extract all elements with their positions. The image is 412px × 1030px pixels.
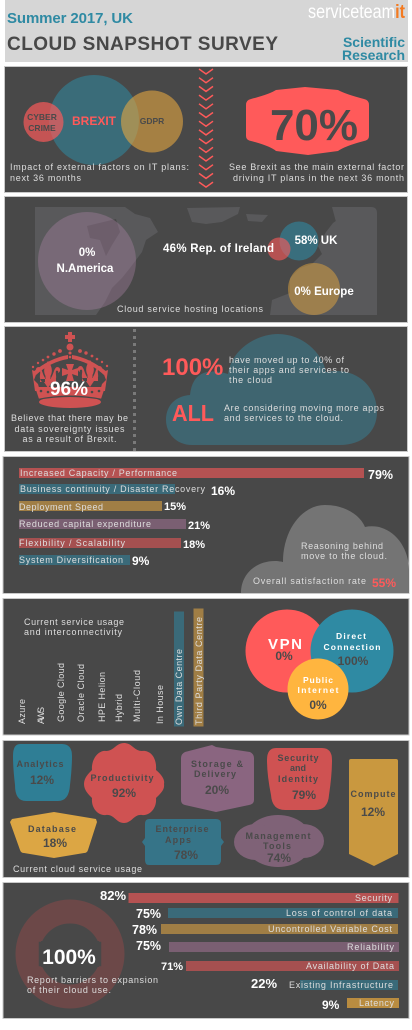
vertical service labels: Azure [17, 699, 27, 724]
label: Scientific Research: Research [342, 47, 405, 63]
bar: Flexibility [19, 538, 205, 551]
bar: Availability of Data: Availability of Data [306, 961, 394, 971]
badge: Security and Identity: Identity [278, 774, 318, 784]
world map [35, 207, 377, 315]
venn: VPN, direct connection, public internet: VPN [268, 636, 302, 653]
caption: reasoning: move to the cloud. [301, 551, 387, 561]
bar: Reliability: 75% [136, 939, 161, 953]
badge: Management Tools: Tools [263, 841, 291, 851]
subtitle: Summer 2017, UK: Summer 2017, UK [7, 10, 133, 27]
cloud: reasoning [241, 505, 409, 593]
badge: Analytics: Analytics [16, 759, 64, 769]
venn: VPN, direct connection, public internet: Direct [336, 631, 366, 641]
badge: Productivity [84, 743, 164, 823]
caption: service usage: and interconnectivity [24, 627, 122, 637]
bar: Reliability [136, 939, 399, 953]
circle: Europe [288, 263, 354, 315]
badge: Enterprise Apps [142, 819, 224, 865]
bar: Increased Capacity [19, 468, 393, 482]
bar: Uncontrolled Variable Cost: Uncontrolled Variable Cost [268, 924, 392, 934]
venn: VPN, direct connection, public internet: Public [303, 675, 333, 685]
bar: Loss of control: 75% [136, 907, 161, 921]
badge: Compute [349, 759, 398, 866]
badge: Compute: Compute [350, 789, 396, 799]
venn diagram: external factors: CYBER [27, 112, 57, 122]
bar: Security: Security [355, 893, 392, 903]
caption: hosting locations: Cloud service hosting locations [117, 304, 264, 314]
badge: Productivity: 92% [112, 786, 136, 800]
bar: Flexibility: 18% [183, 539, 205, 551]
icon: crown with 96% [32, 332, 108, 408]
vertical service labels: Third Party Data Centre [194, 617, 204, 725]
cloud shape [166, 334, 377, 445]
badge: 70%: 70% [270, 101, 358, 150]
bar: Loss of control: Loss of control of data [286, 908, 392, 918]
bar: Existing Infrastructure [251, 976, 398, 991]
caption: satisfaction: Overall satisfaction rate [253, 576, 366, 586]
bar: Flexibility: Flexibility / Scalability [19, 538, 126, 548]
caption: considering moving more: and services to the cloud. [224, 413, 343, 423]
venn: VPN, direct connection, public internet: Internet [298, 685, 339, 695]
circle: N.America: 0% [79, 247, 95, 259]
bar: System Diversification [19, 554, 150, 568]
venn: VPN, direct connection, public internet: 0% [275, 649, 293, 663]
bar: Latency [322, 998, 399, 1012]
bar: Existing Infrastructure: 22% [251, 976, 277, 991]
venn: VPN, direct connection, public internet: 0% [309, 698, 327, 712]
bar: Business continuity: 16% [211, 484, 235, 498]
bar: Availability of Data: 71% [161, 961, 183, 973]
panel: service usage and interconnectivity [3, 598, 409, 735]
bar: System Diversification: System Diversification [19, 555, 123, 565]
label: Scientific Research: Scientific [343, 34, 405, 50]
bar: Security [100, 888, 398, 903]
stat: 55%: 55% [372, 576, 396, 590]
badge: Database: 18% [43, 836, 67, 850]
caption: moved up to 40%: have moved up to 40% of [229, 355, 344, 365]
vertical service labels: Multi-Cloud [132, 670, 142, 722]
caption: moved up to 40%: the cloud [229, 375, 272, 385]
bar: Deployment Speed: 15% [164, 501, 186, 513]
vertical service labels: Google Cloud [56, 663, 66, 722]
badge: Security and Identity: Security [278, 753, 318, 763]
circle: N.America: N.America [57, 263, 114, 275]
bar: Security: 82% [100, 888, 126, 903]
panel: external factors [4, 66, 408, 192]
badge: Management Tools: Management [246, 831, 310, 841]
venn: VPN, direct connection, public internet: Connection [324, 642, 380, 652]
caption: moved up to 40%: their apps and services to [229, 365, 349, 375]
bar: Reduced capital expenditure [19, 519, 210, 532]
vertical service labels: Own Data Centre [174, 649, 184, 725]
caption: sovereignty: as a result of Brexit. [22, 434, 116, 444]
vertical service labels: AWS [36, 707, 46, 724]
circle: UK [280, 222, 338, 260]
caption: Brexit main factor: See Brexit as the main external factor [229, 162, 404, 172]
vertical service labels [17, 617, 204, 725]
bar: Reduced capital expenditure: 21% [188, 520, 210, 532]
caption: impact of external factors: next 36 months [10, 173, 82, 183]
bar: Loss of control [136, 907, 398, 921]
vertical service labels: Hybrid [114, 694, 124, 722]
bar: Latency: Latency [359, 998, 394, 1008]
circle: N.America [38, 212, 136, 310]
bar: Increased Capacity: Increased Capacity / Performance [20, 468, 177, 478]
badge: Productivity: Productivity [90, 773, 154, 783]
panel: data sovereignty [4, 326, 408, 452]
badge: 70% [246, 87, 369, 155]
badge: Security and Identity [267, 748, 332, 810]
venn diagram: external factors: GDPR [140, 116, 164, 126]
caption: considering moving more: Are considering moving more apps [224, 403, 384, 413]
circle: Rep. of Ireland: 46% Rep. of Ireland [163, 243, 274, 255]
badge: Management Tools: 74% [267, 851, 291, 865]
bar: Reliability: Reliability [347, 942, 394, 952]
bar: Third Party Data Centre [194, 608, 204, 726]
bar: Existing Infrastructure: Existing Infrastructure [289, 980, 393, 990]
badge: Enterprise Apps: 78% [174, 848, 198, 862]
bar: Latency: 9% [322, 998, 340, 1012]
caption: barriers: of their cloud use. [27, 985, 111, 995]
venn: VPN, direct connection, public internet [246, 610, 394, 720]
circle: Rep. of Ireland [163, 238, 290, 260]
bar: Reduced capital expenditure: Reduced capital expenditure [19, 519, 151, 529]
chevron divider [199, 69, 213, 187]
icon: crown with 96%: 96% [50, 379, 88, 400]
right fleur [78, 360, 102, 387]
venn diagram: external factors [24, 75, 183, 165]
bar: Deployment Speed: Deployment Speed [19, 502, 103, 512]
badge: Enterprise Apps: Enterprise [156, 824, 208, 834]
venn diagram: external factors: CRIME [28, 123, 56, 133]
header banner [5, 0, 408, 63]
bar: System Diversification: 9% [132, 554, 150, 568]
caption: sovereignty: data sovereignty issues [14, 424, 125, 434]
panel: cloud service usage [3, 740, 409, 878]
bar: Uncontrolled Variable Cost [132, 923, 398, 937]
circle: UK: 58% UK [295, 235, 338, 247]
badge: Storage & Delivery: Delivery [194, 769, 236, 779]
caption: barriers: Report barriers to expansion [27, 975, 158, 985]
badge: Storage & Delivery: Storage & [191, 759, 244, 769]
badge: Database: Database [28, 824, 76, 834]
bar: Availability of Data [161, 961, 399, 973]
caption: impact of external factors: Impact of external factors on IT plans: [10, 162, 189, 172]
bar: Business continuity: Business continuity / Disaster Recovery [20, 484, 205, 494]
title: Cloud Snapshot Survey: CLOUD SNAPSHOT SURVEY [7, 34, 278, 55]
bar: Own Data Centre [174, 612, 184, 726]
vertical service labels: Oracle Cloud [76, 664, 86, 722]
panel: reasons for moving [3, 456, 409, 594]
caption: Brexit main factor: driving IT plans in the next 36 month [233, 173, 404, 183]
bar: Increased Capacity: 79% [368, 468, 393, 482]
badge: Enterprise Apps: Apps [165, 835, 191, 845]
stat: ALL: ALL [172, 400, 214, 426]
vertical service labels: In House [155, 685, 165, 724]
donut: 100% [28, 912, 112, 996]
badge: Database [10, 812, 97, 858]
left fleur [36, 361, 60, 388]
badge: Analytics: 12% [30, 773, 54, 787]
vertical service labels: HPE Helion [97, 672, 107, 722]
caption: service usage: Current service usage [24, 617, 124, 627]
logo: serviceteamit: serviceteamit [308, 2, 406, 23]
stat: 100%: 100% [162, 354, 223, 381]
badge: Analytics [13, 744, 72, 801]
bar: Uncontrolled Variable Cost: 78% [132, 923, 157, 937]
badge: Management Tools [234, 815, 324, 867]
badge: Storage & Delivery [181, 745, 254, 812]
donut: 100%: 100% [42, 946, 96, 969]
venn: VPN, direct connection, public internet: 100% [338, 654, 369, 668]
dotted divider [133, 329, 136, 451]
badge: Storage & Delivery: 20% [205, 783, 229, 797]
caption: sovereignty: Believe that there may be [11, 413, 128, 423]
panel: barriers [3, 882, 409, 1018]
caption: current cloud service usage: Current cloud service usage [13, 864, 142, 874]
bar: Deployment Speed [19, 501, 186, 513]
bar: Business continuity [19, 484, 235, 498]
venn diagram: external factors: BREXIT [72, 114, 117, 128]
badge: Compute: 12% [361, 805, 385, 819]
badge: Security and Identity: and [290, 763, 306, 773]
badge: Security and Identity: 79% [292, 788, 316, 802]
circle: Europe: 0% Europe [294, 286, 354, 298]
caption: reasoning: Reasoning behind [301, 541, 383, 551]
panel: hosting locations [4, 196, 408, 322]
